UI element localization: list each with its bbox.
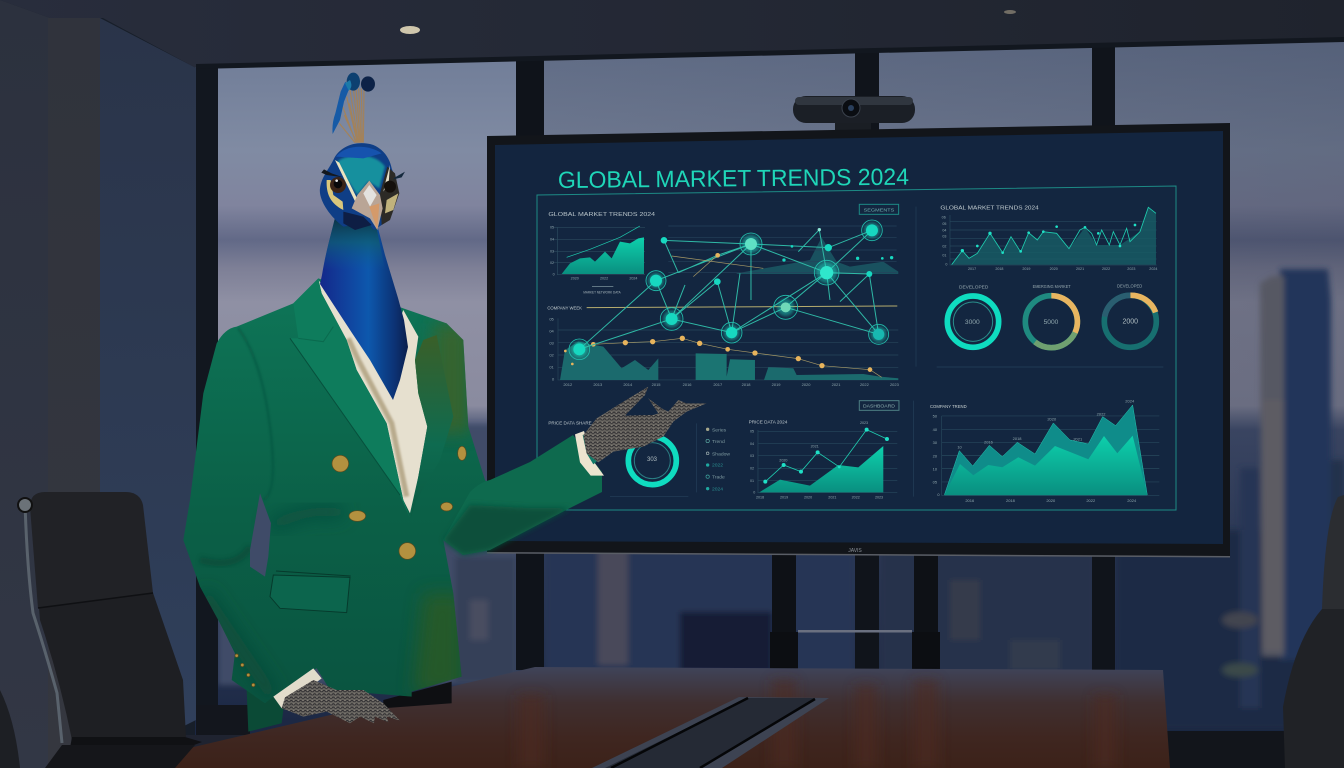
donut 3 (1104, 284, 1156, 347)
gap under arm (250, 493, 271, 577)
mini area chart: 02 (550, 261, 554, 265)
face white stripes (335, 160, 359, 203)
stacked area chart: 2016 (984, 439, 994, 444)
stacked area chart: 10 (957, 444, 963, 449)
lower chart (549, 317, 900, 387)
dashboard frame (537, 186, 1176, 510)
line and area chart: 2020 (779, 458, 787, 462)
right face dark (380, 167, 399, 225)
gold trend line (564, 336, 882, 377)
stacked area chart: 2024 (1127, 498, 1137, 503)
legend (706, 427, 730, 492)
mini area chart (550, 226, 645, 281)
line chart: 06 (942, 215, 946, 219)
mini area chart: 2024 (629, 277, 637, 281)
lower chart: 01 (549, 365, 555, 370)
chart heading: GLOBAL MARKET TRENDS 2024 (548, 212, 655, 218)
stacked area chart: COMPANY TREND (930, 404, 967, 410)
section heading: COMPANY WEEK (547, 305, 583, 310)
line chart: 03 (942, 234, 946, 238)
legend: Shadow (712, 451, 730, 457)
line chart: 05 (942, 222, 946, 226)
line and area chart: 05 (750, 430, 754, 434)
trousers (247, 682, 452, 732)
stacked area chart: 50 (933, 414, 938, 419)
mini area chart: 2020 (571, 277, 579, 281)
beak (352, 181, 383, 230)
caption: MARKET NETWORK DATA (583, 290, 621, 294)
donut: 303 (647, 457, 658, 463)
line chart: 04 (942, 229, 946, 233)
city skyline (218, 269, 1344, 730)
tag: SEGMENTS (864, 207, 894, 212)
donut 3: 2000 (1123, 319, 1138, 326)
lower chart: 2017 (713, 382, 723, 387)
right office chair (1283, 495, 1344, 768)
dividers (913, 207, 1163, 497)
lower chart: 2015 (652, 382, 661, 387)
display monitor (487, 123, 1230, 558)
mini area chart: 04 (550, 238, 554, 242)
line chart: 02 (942, 245, 946, 249)
line and area chart: 2023 (860, 421, 868, 425)
left wall (0, 0, 50, 768)
lower cuff (273, 668, 322, 708)
line and area chart: 02 (750, 467, 754, 471)
line chart: 2021 (1076, 267, 1084, 271)
eye (330, 177, 346, 193)
donut 2: 5000 (1044, 319, 1059, 326)
donut 1: DEVELOPED (959, 284, 989, 289)
lower hand (282, 680, 400, 723)
jacket shading (200, 323, 470, 697)
donut 3: DEVELOPED (1117, 284, 1143, 289)
line chart: 2022 (1102, 267, 1110, 271)
tag: DASHBOARD (863, 403, 895, 408)
stacked area chart: 2016 (965, 498, 975, 503)
conference camera (793, 96, 915, 130)
line chart: 2023 (1127, 267, 1135, 271)
lower chart: 0 (552, 377, 555, 382)
mini area chart: 0 (553, 272, 555, 276)
stacked area chart: 30 (933, 440, 938, 445)
lower chart: 2014 (623, 382, 633, 387)
line and area chart: PRICE DATA 2024 (749, 420, 788, 426)
stacked area chart: 2020 (1046, 498, 1056, 503)
table (104, 667, 1170, 768)
line and area chart: 03 (750, 454, 754, 458)
lower chart: 2016 (683, 382, 692, 387)
jacket and shirt (183, 278, 490, 703)
feather tips (332, 73, 375, 134)
peacock presenter (183, 73, 707, 732)
window sky (195, 40, 1344, 740)
stacked area chart: 05 (933, 480, 938, 485)
gold buttons (235, 502, 453, 687)
network links (579, 230, 879, 349)
pocket flap (270, 575, 350, 613)
jacket body (183, 278, 490, 703)
feather stems (339, 88, 364, 143)
display monitor: JAVIS (848, 548, 862, 554)
line chart: 2018 (995, 267, 1003, 271)
tag (859, 204, 899, 214)
panel: network and trend charts (547, 204, 900, 387)
line chart: 0 (945, 263, 947, 267)
stacked area chart: 2020 (1047, 417, 1057, 422)
stacked area chart: 2018 (1013, 436, 1022, 441)
line and area chart (749, 420, 897, 500)
line chart: 2017 (968, 267, 976, 271)
lower jacket details (235, 502, 453, 723)
tag (859, 401, 899, 410)
stacked area chart: 2022 (1086, 498, 1096, 503)
window mullions (196, 65, 218, 705)
stacked area chart: 0 (937, 492, 940, 497)
donut 1: 3000 (965, 319, 980, 326)
stacked area chart: 10 (933, 466, 938, 471)
legend: 2022 (712, 463, 723, 469)
lower chart: 2013 (593, 382, 603, 387)
line chart (942, 207, 1157, 271)
stacked area chart: 20 (933, 453, 938, 458)
line and area chart: 2019 (780, 496, 788, 500)
lower chart: 2012 (563, 382, 573, 387)
donut 2 (1025, 284, 1077, 348)
lower chart: 2018 (742, 382, 751, 387)
stacked area chart: 2021 (1073, 437, 1083, 442)
stacked area chart: 40 (933, 427, 938, 432)
line and area chart: 2023 (875, 496, 883, 500)
line chart: 2020 (1050, 267, 1058, 271)
line and area chart: 04 (750, 442, 754, 446)
legend: Trend (712, 439, 725, 445)
screen title: GLOBAL MARKET TRENDS 2024 (558, 164, 909, 193)
lower chart: 05 (549, 317, 555, 322)
stacked area chart: 2018 (1006, 498, 1016, 503)
raised hand (575, 387, 707, 476)
legend: Trade (712, 475, 725, 481)
stacked area chart: 2024 (1125, 399, 1135, 404)
line chart: 01 (942, 253, 946, 257)
line and area chart: 2018 (756, 496, 764, 500)
line and area chart: 0 (753, 491, 755, 495)
gold buttons on chest (332, 446, 466, 472)
window sill (1167, 731, 1344, 768)
right lapel (411, 335, 453, 518)
mini area chart: 2022 (600, 277, 608, 281)
lower chart: 2019 (772, 382, 781, 387)
lower chart: 03 (549, 341, 555, 346)
line and area chart: 2021 (811, 445, 819, 449)
legend: Series (712, 427, 727, 433)
shirt (318, 280, 427, 513)
donut (628, 437, 676, 485)
left office chair (0, 492, 202, 768)
legend: 2024 (712, 486, 723, 492)
caption (583, 287, 621, 294)
yellow divider (587, 306, 897, 308)
head (320, 143, 395, 230)
lower chart: 2021 (832, 382, 841, 387)
donut 2: EMERGING MARKET (1033, 284, 1071, 289)
crest and head (320, 73, 405, 230)
table cable tray (592, 697, 829, 768)
mini area chart: 05 (550, 226, 554, 230)
floor-stand legs (770, 555, 940, 673)
lower chart: 2022 (860, 382, 870, 387)
stacked area chart (930, 399, 1159, 503)
lower chart: 04 (549, 329, 555, 334)
stacked area chart: 2022 (1097, 411, 1106, 416)
right forearm sleeve (443, 435, 602, 555)
line chart: 2024 (1149, 267, 1157, 271)
right background peak (737, 237, 898, 274)
panel: bottom-left charts (548, 401, 899, 500)
mini area chart: 03 (550, 250, 554, 254)
donut 1 (947, 284, 999, 347)
network nodes (569, 220, 893, 360)
line and area chart: 2021 (828, 496, 836, 500)
neck (320, 205, 408, 400)
panel: right column charts (913, 205, 1163, 503)
left lapel (290, 278, 410, 518)
lower chart: 2020 (802, 382, 811, 387)
line and area chart: 2022 (852, 496, 860, 500)
lower chart: 2023 (890, 382, 900, 387)
line and area chart: 01 (750, 479, 754, 483)
lower chart: 02 (549, 353, 555, 358)
line chart: 2019 (1022, 267, 1030, 271)
line chart heading: GLOBAL MARKET TRENDS 2024 (940, 205, 1039, 211)
heading: PRICE DATA SHARE (548, 420, 592, 426)
line and area chart: 2020 (804, 496, 812, 500)
ceiling (0, 0, 1344, 68)
